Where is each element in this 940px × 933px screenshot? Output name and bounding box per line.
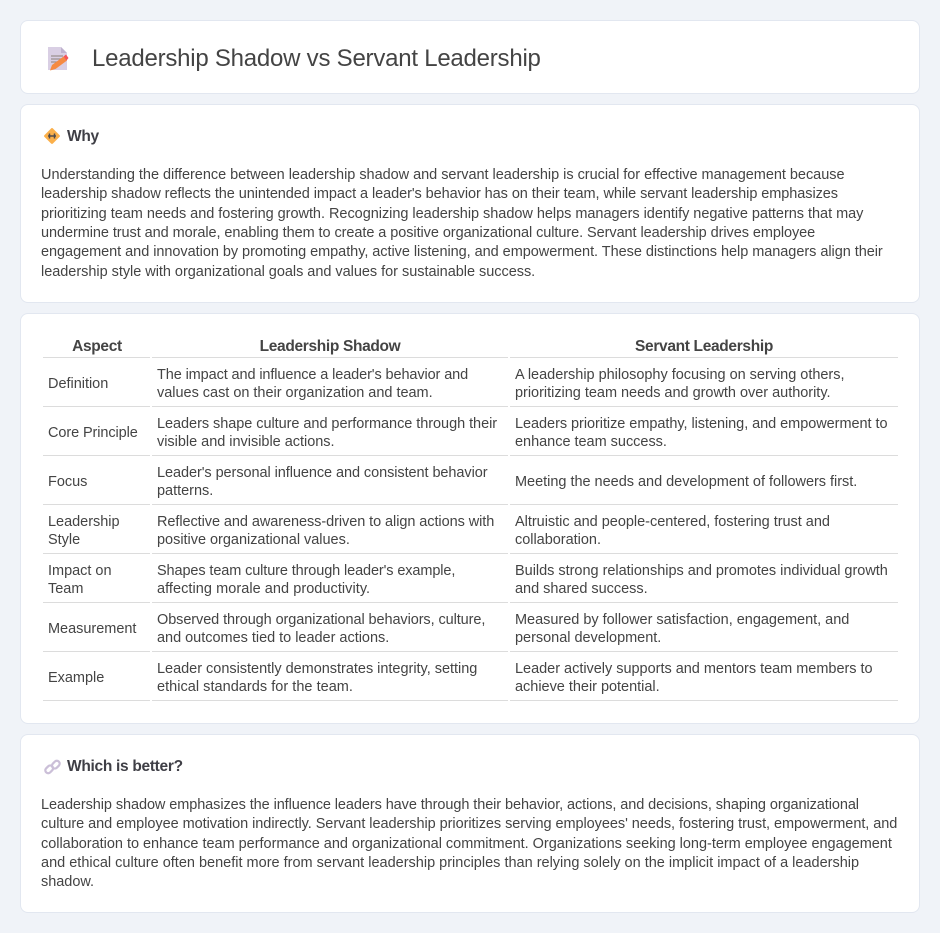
row: measurement: personal development. [515, 630, 661, 646]
row: leadership style [48, 514, 830, 548]
text block: why: engagement and innovation by promoting empathy, active listening, and empowerment. These distinctions help managers align their [41, 244, 883, 260]
text block: which is better: collaboration to enhance team performance and organizational commitment. Organizations seeking long-term employee engagement [41, 836, 892, 852]
text block: which is better: culture and employee motivation indirectly. Servant leadership prioritizes serving employees' needs, fostering trust, empowerment, and [41, 816, 897, 832]
row: example: Leader actively supports and mentors team members to [515, 661, 873, 677]
text block: why: leadership style with organizational goals and values for sustainable success. [41, 264, 535, 280]
row: impact on team: Shapes team culture through leader's example, [157, 563, 455, 579]
row: definition: prioritizing team needs and growth over authority. [515, 385, 830, 401]
row: leadership style: Altruistic and people-centered, fostering trust and [515, 514, 830, 530]
row: leadership style: Style [48, 532, 80, 548]
row: impact on team: Impact on [48, 563, 112, 579]
row: core principle [48, 416, 887, 450]
row: measurement [48, 612, 849, 646]
text block: which is better: Leadership shadow emphasizes the influence leaders have through their behavior, actions, and decisions, shaping organizational [41, 797, 859, 813]
heading: why: Why [67, 128, 99, 145]
row: leadership style: positive organizational values. [157, 532, 350, 548]
table header row: Aspect [72, 338, 122, 355]
row: impact on team: and shared success. [515, 581, 648, 597]
row: example: ethical standards for the team. [157, 679, 353, 695]
icon: diamond sign [44, 128, 60, 144]
row: impact on team: Team [48, 581, 83, 597]
row: definition: The impact and influence a leader's behavior and [157, 367, 468, 383]
row: measurement: Measured by follower satisfaction, engagement, and [515, 612, 849, 628]
text block: why: leadership shadow reflects the unintended impact a leader's behavior has on their team, while servant leadership emphasizes [41, 186, 838, 202]
row: leadership style: collaboration. [515, 532, 601, 548]
row: impact on team: affecting morale and productivity. [157, 581, 370, 597]
row: definition: Definition [48, 376, 108, 392]
table header row: Servant Leadership [635, 338, 773, 355]
icon: chain link [44, 760, 61, 774]
row: example [48, 661, 873, 695]
text block: which is better: and ethical culture often benefit more from servant leadership principles than relying solely on the implicit impact of a leadership [41, 855, 859, 871]
row: core principle: visible and invisible actions. [157, 434, 335, 450]
table header row [72, 338, 773, 355]
text block: why: undermine trust and morale, enabling them to create a positive organizational culture. Servant leadership drives employee [41, 225, 815, 241]
text block: why [41, 167, 883, 280]
row: leadership style: Leadership [48, 514, 120, 530]
row: impact on team: Builds strong relationships and promotes individual growth [515, 563, 888, 579]
panel: comparison table [20, 313, 920, 724]
row: core principle: Leaders prioritize empathy, listening, and empowerment to [515, 416, 887, 432]
row: measurement: and outcomes tied to leader actions. [157, 630, 389, 646]
row: definition [48, 367, 844, 401]
row: example: Leader consistently demonstrates integrity, setting [157, 661, 477, 677]
table header row: Leadership Shadow [260, 338, 400, 355]
text block: which is better: shadow. [41, 874, 94, 890]
row: example: Example [48, 670, 104, 686]
row: leadership style: Reflective and awareness-driven to align actions with [157, 514, 494, 530]
row: definition: values cast on their organization and team. [157, 385, 433, 401]
row: core principle: Core Principle [48, 425, 138, 441]
panel: title card [20, 20, 920, 94]
panel: which is better [20, 734, 920, 913]
text block: which is better [41, 797, 897, 890]
row: impact on team [48, 563, 888, 597]
row: example: achieve their potential. [515, 679, 660, 695]
row: focus: Meeting the needs and development of followers first. [515, 474, 857, 490]
panel: why [20, 104, 920, 303]
row: focus: Leader's personal influence and consistent behavior [157, 465, 488, 481]
row: focus: Focus [48, 474, 87, 490]
title: Leadership Shadow vs Servant Leadership [92, 45, 541, 72]
icon: document with pencil [48, 47, 68, 70]
text block: why: Understanding the difference between leadership shadow and servant leadership is crucial for effective management because [41, 167, 844, 183]
row: measurement: Measurement [48, 621, 136, 637]
row: focus [48, 465, 857, 499]
text block: why: prioritizing team needs and fostering growth. Recognizing leadership shadow helps managers identify negative patterns that may [41, 206, 863, 222]
row: core principle: Leaders shape culture and performance through their [157, 416, 497, 432]
row: measurement: Observed through organizational behaviors, culture, [157, 612, 485, 628]
heading: which is better: Which is better? [67, 758, 183, 775]
row: focus: patterns. [157, 483, 213, 499]
row: definition: A leadership philosophy focusing on serving others, [515, 367, 844, 383]
row: core principle: enhance team success. [515, 434, 667, 450]
